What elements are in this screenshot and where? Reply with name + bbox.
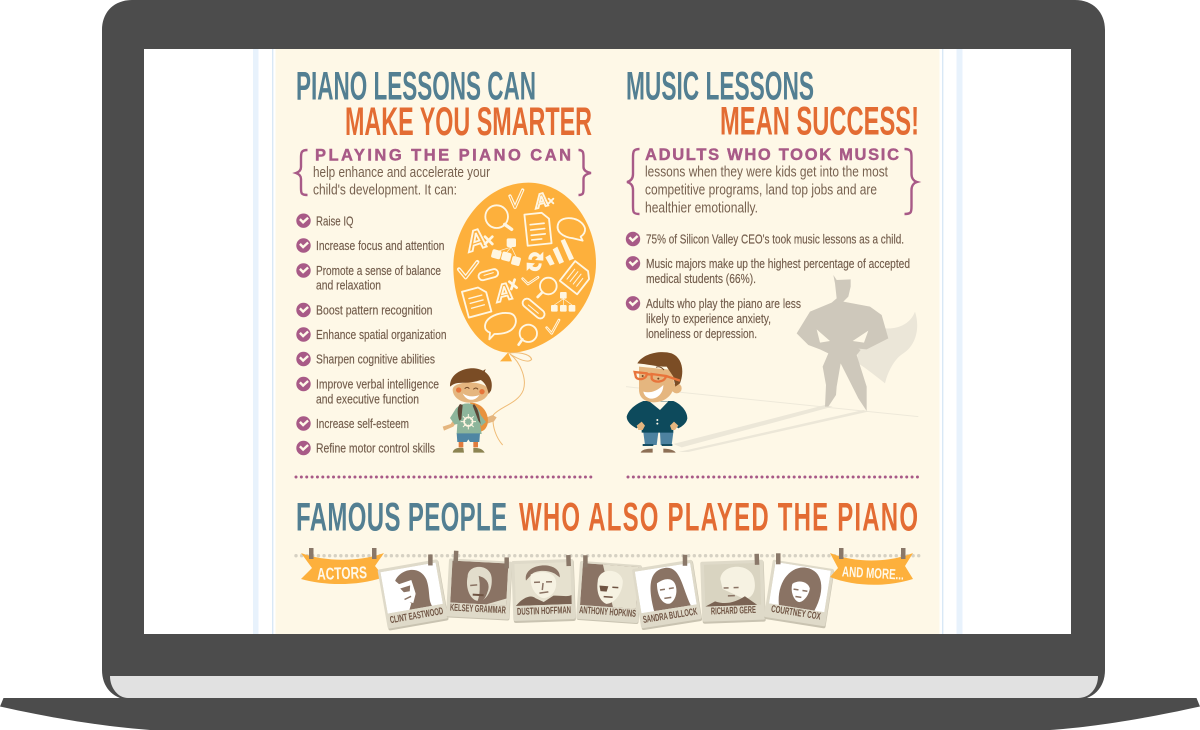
heading: music lessons mean success [626, 64, 919, 144]
heading: piano lessons can make you smarter [296, 64, 592, 144]
illustration: man with superhero shadow [626, 275, 918, 453]
clothesline with photos [296, 548, 920, 631]
photo: Kelsey Grammar [446, 550, 513, 621]
photo: Kelsey Grammar: KELSEY GRAMMAR [450, 603, 507, 616]
infographic page [253, 49, 962, 634]
checklist: music facts: Adults who play the piano are less [646, 296, 801, 311]
photo: Dustin Hoffman [511, 555, 576, 623]
checklist: piano benefits: Improve verbal intelligence [316, 376, 439, 392]
panel: piano lessons [296, 64, 596, 477]
laptop light strip [110, 676, 1098, 698]
intro text with braces: healthier emotionally. [645, 199, 758, 216]
photo: Sandra Bullock [631, 553, 702, 630]
heading: famous people who also played the piano: WHO ALSO PLAYED THE PIANO [519, 494, 918, 539]
checklist: piano benefits: Refine motor control skills [316, 441, 435, 456]
checklist: piano benefits [296, 214, 446, 456]
intro text with braces: help enhance and accelerate your [313, 164, 490, 181]
photo: Richard Gere: RICHARD GERE [711, 605, 756, 617]
banner: and more [830, 548, 913, 585]
photo: Dustin Hoffman: DUSTIN HOFFMAN [517, 605, 571, 618]
photo: Clint Eastwood: CLINT EASTWOOD [389, 606, 444, 626]
icon: balloon with study symbols: A [461, 222, 490, 258]
checklist: piano benefits: Raise IQ [316, 214, 354, 228]
intro text with braces: PLAYING THE PIANO CAN [315, 146, 571, 164]
photo: Richard Gere [700, 554, 766, 624]
photo: Courtney Cox: COURTNEY COX [770, 604, 822, 623]
icon: smiling boy [443, 368, 497, 453]
banner: and more: AND MORE... [842, 564, 904, 584]
icon: balloon with study symbols: A [491, 278, 516, 308]
checklist: piano benefits: Sharpen cognitive abilities [316, 352, 435, 366]
checklist: piano benefits: Increase self-esteem [316, 416, 409, 431]
icon: balloon with study symbols [453, 183, 596, 445]
photo: Courtney Cox [764, 552, 836, 629]
photo: Anthony Hopkins [576, 555, 643, 624]
checklist: music facts: likely to experience anxiety, [646, 311, 771, 326]
checklist: piano benefits: Boost pattern recognition [316, 302, 432, 318]
intro text with braces [296, 146, 591, 198]
divider: right dotted line [628, 476, 922, 478]
heading: famous people who also played the piano: FAMOUS PEOPLE [296, 494, 507, 539]
intro text with braces: child's development. It can: [313, 182, 457, 198]
checklist: piano benefits: and relaxation [316, 278, 381, 293]
photo: Clint Eastwood [376, 553, 449, 631]
intro text with braces: ADULTS WHO TOOK MUSIC [645, 146, 899, 164]
checklist: music facts: 75% of Silicon Valley CEO's took music lessons as a child. [646, 232, 904, 246]
laptop base [0, 698, 1200, 730]
photo: Sandra Bullock: SANDRA BULLOCK [642, 606, 699, 626]
intro text with braces [627, 146, 917, 216]
heading: piano lessons can make you smarter: PIANO LESSONS CAN [296, 64, 536, 108]
photo: Anthony Hopkins: ANTHONY HOPKINS [579, 605, 637, 620]
divider: left dotted line [296, 476, 596, 478]
checklist: piano benefits: Promote a sense of balance [316, 263, 441, 278]
page side stripes [253, 49, 962, 634]
checklist: music facts: medical students (66%). [646, 271, 756, 286]
checklist: music facts: Music majors make up the highest percentage of accepted [646, 256, 910, 271]
intro text with braces: competitive programs, land top jobs and are [645, 182, 877, 198]
heading: music lessons mean success: MEAN SUCCESS! [720, 100, 919, 144]
screen background [144, 49, 1071, 634]
checklist: piano benefits: Increase focus and attention [316, 238, 444, 253]
heading: piano lessons can make you smarter: MAKE YOU SMARTER [345, 100, 592, 144]
banner: actors [301, 548, 384, 584]
cream paper panel [276, 49, 940, 634]
checklist: piano benefits: Enhance spatial organization [316, 327, 446, 342]
banner: actors: ACTORS [317, 563, 367, 584]
checklist: music facts [626, 232, 910, 341]
panel: music lessons [626, 64, 922, 477]
heading: famous people who also played the piano [296, 494, 918, 539]
checklist: music facts: loneliness or depression. [646, 326, 757, 341]
intro text with braces: lessons when they were kids get into the most [645, 164, 889, 181]
checklist: piano benefits: and executive function [316, 391, 419, 406]
heading: music lessons mean success: MUSIC LESSONS [626, 64, 814, 108]
icon: balloon with study symbols: A [531, 190, 551, 214]
